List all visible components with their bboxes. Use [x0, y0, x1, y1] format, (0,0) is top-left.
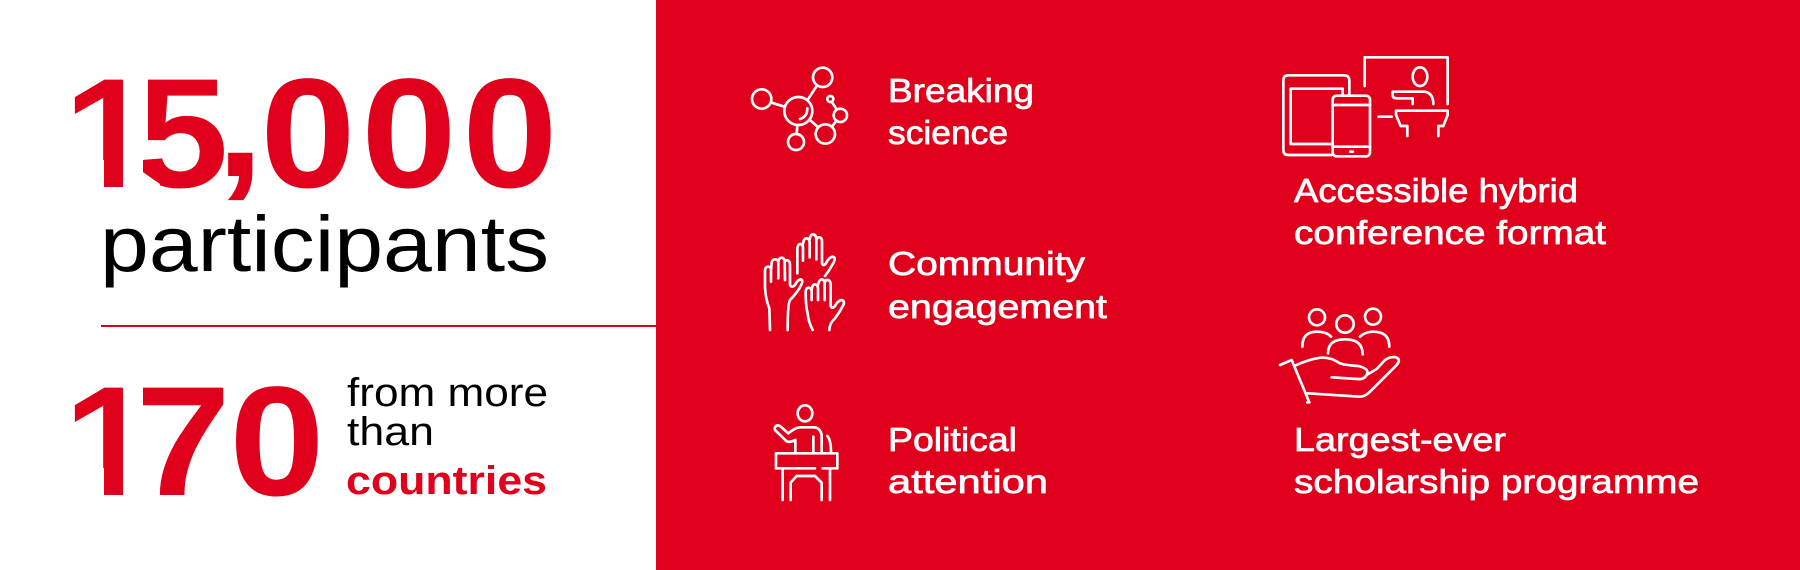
label: from more than countries: than: [347, 410, 434, 454]
label: from more than countries: [346, 371, 548, 503]
text: Community engagement: engagement: [888, 288, 1107, 325]
label: from more than countries: countries: [346, 459, 547, 503]
text: Political attention: attention: [888, 463, 1048, 500]
text: Largest-ever scholarship programme: Largest-ever: [1294, 421, 1506, 458]
text: Breaking science: Breaking: [888, 72, 1034, 109]
text: Largest-ever scholarship programme: scholarship programme: [1294, 463, 1699, 500]
text: Accessible hybrid conference format: conference format: [1294, 214, 1606, 251]
text: Community engagement: [888, 245, 1107, 325]
icon: speaker at podium: [775, 405, 837, 500]
text: Largest-ever scholarship programme: [1294, 421, 1699, 500]
divider line: [101, 325, 656, 327]
panel: red background: [656, 0, 1800, 570]
icon: devices and online speaker: [1283, 57, 1448, 156]
text: Breaking science: [888, 72, 1034, 151]
icon: raised hands: [765, 234, 844, 330]
stat: 170: 170: [63, 354, 325, 528]
label: from more than countries: from more: [347, 371, 548, 415]
icon: hand holding people: [1280, 309, 1399, 402]
text: Accessible hybrid conference format: [1294, 172, 1606, 251]
icon: molecule: [752, 68, 847, 150]
text: Accessible hybrid conference format: Accessible hybrid: [1294, 172, 1578, 209]
stat: 15,000: 15,000: [63, 35, 558, 220]
text: Political attention: Political: [888, 421, 1017, 458]
text: Political attention: [888, 421, 1048, 500]
text: Community engagement: Community: [888, 245, 1086, 282]
label: participants: participants: [100, 199, 549, 288]
text: Breaking science: science: [888, 114, 1008, 151]
